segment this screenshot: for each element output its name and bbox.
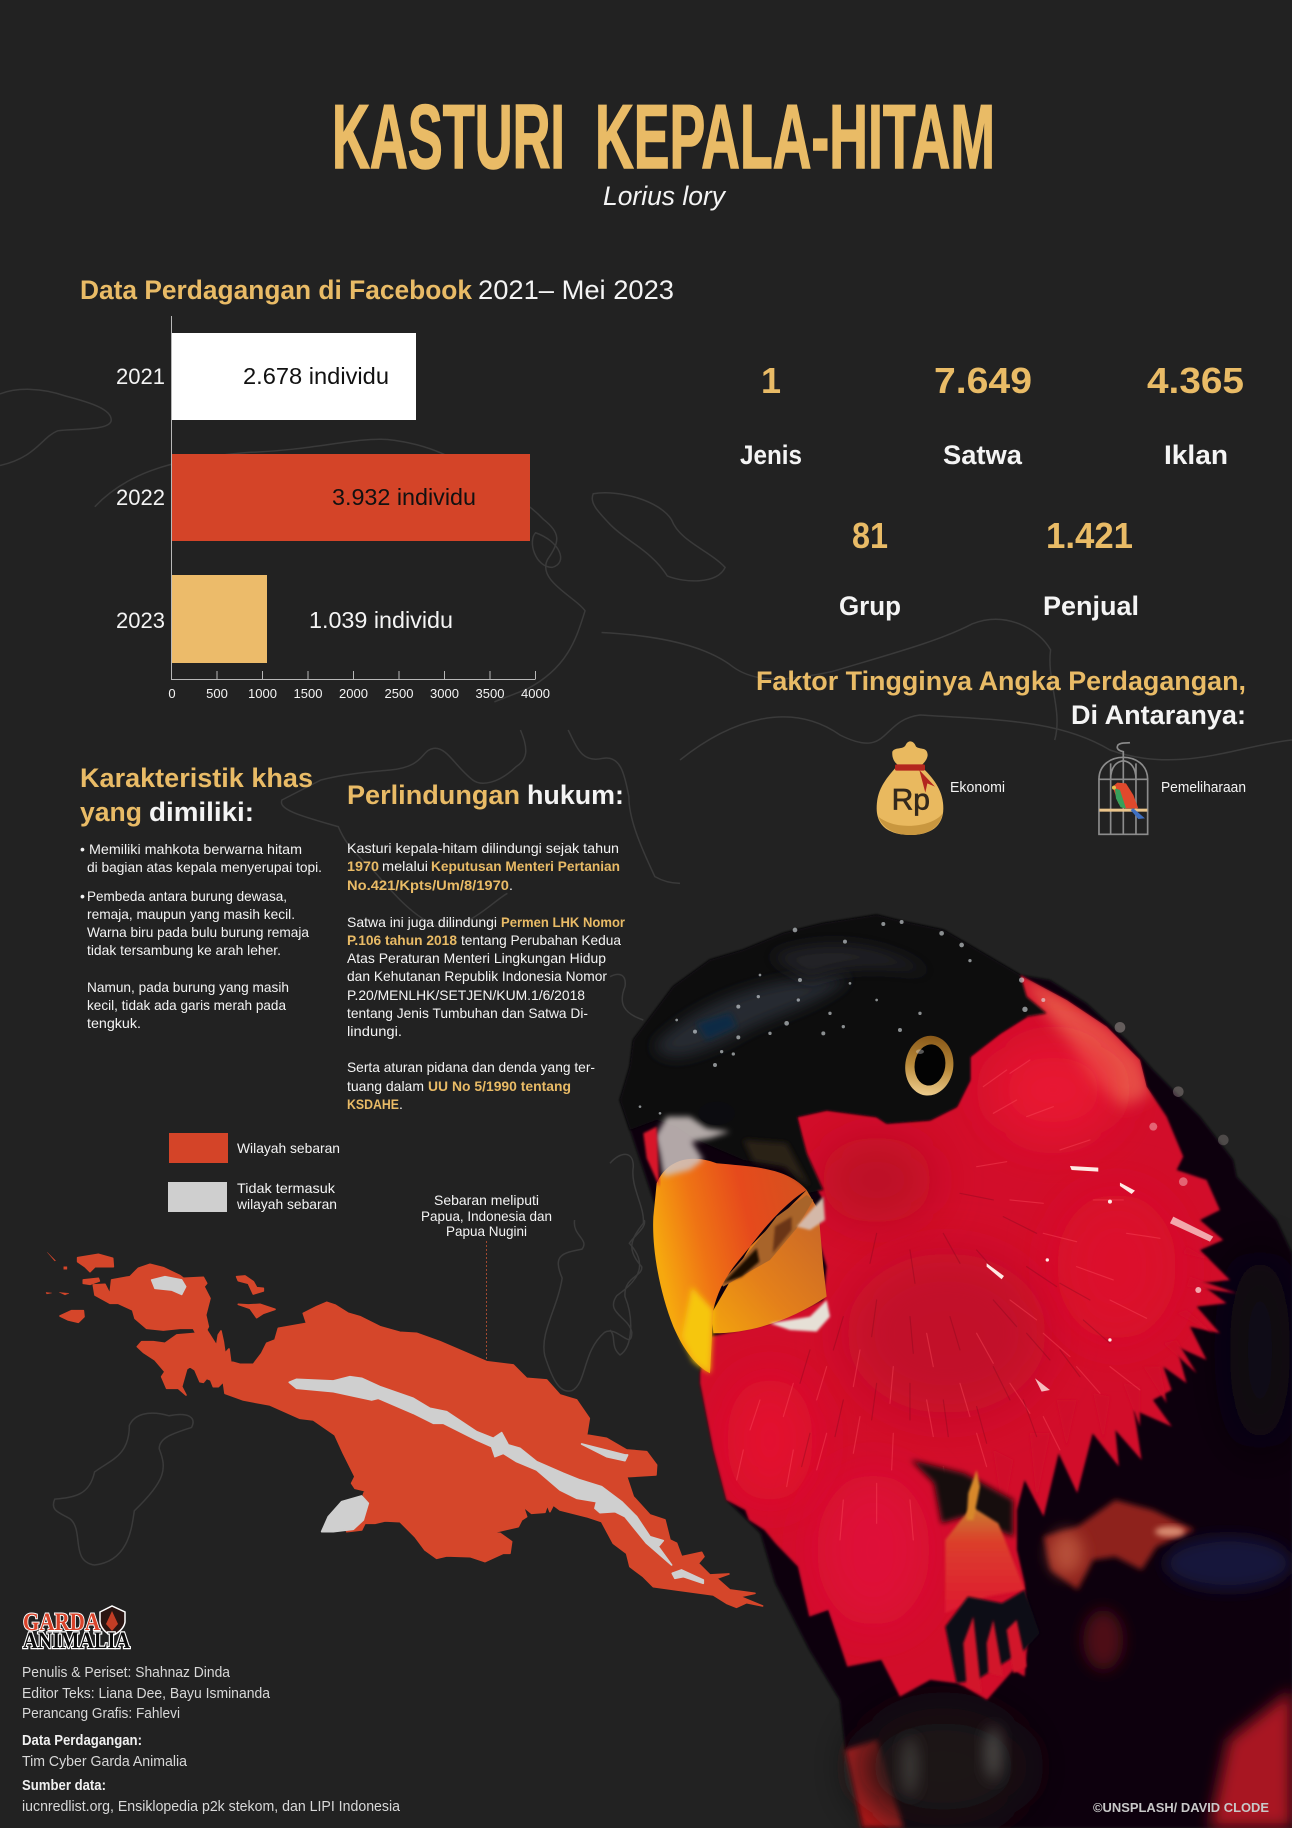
- feather strokes: [737, 1060, 1160, 1540]
- bar 2022: [172, 454, 530, 541]
- text block: legal protection: .: [399, 1096, 403, 1112]
- text block: legal protection: Permen LHK Nomor: [501, 914, 626, 930]
- text block: characteristics: Namun, pada burung yang masih: [87, 979, 289, 995]
- text block: legal protection: Kasturi kepala-hitam dilindungi sejak tahun: [347, 840, 619, 856]
- text block: characteristics: di bagian atas kepala menyerupai topi.: [87, 859, 322, 875]
- eye: [901, 1033, 957, 1099]
- credits: Penulis & Periset: Shahnaz Dinda: [22, 1665, 231, 1681]
- text block: legal protection: KSDAHE: [347, 1096, 399, 1112]
- bar chart: individuals traded per year: 2500: [385, 686, 413, 701]
- text block: characteristics: Memiliki mahkota berwarna hitam: [89, 841, 302, 857]
- statistics panel: Jenis: [740, 440, 802, 470]
- statistics panel: Iklan: [1164, 440, 1228, 470]
- text block: legal protection: tentang Perubahan Kedua: [461, 932, 621, 948]
- credits: Perancang Grafis: Fahlevi: [22, 1706, 180, 1722]
- title: KASTURI: [332, 87, 565, 188]
- text block: characteristics: tidak tersambung ke arah leher.: [87, 942, 281, 958]
- bar chart: individuals traded per year: [116, 316, 550, 701]
- statistics panel: Penjual: [1043, 591, 1139, 621]
- text block: legal protection: lindungi.: [347, 1023, 402, 1039]
- statistics panel: 1: [761, 360, 781, 401]
- bar chart: individuals traded per year: 2000: [339, 686, 368, 701]
- text block: legal protection: 1970: [347, 858, 379, 874]
- text block: legal protection: .: [509, 877, 513, 893]
- subtitle: scientific name: Lorius lory: [603, 181, 726, 211]
- text block: characteristics: Warna biru pada bulu burung remaja: [87, 924, 309, 940]
- map callout: [421, 1192, 552, 1362]
- photo credit: ©UNSPLASH/ DAVID CLODE: [1093, 1800, 1269, 1815]
- icon: money bag: Rp: [892, 783, 930, 816]
- logo: Garda Animalia: [23, 1606, 130, 1653]
- text block: legal protection: Keputusan Menteri Pertanian: [431, 858, 620, 874]
- heading: factors behind the trade: [756, 666, 1246, 730]
- heading: legal protection: Perlindungan: [347, 780, 520, 810]
- neck shadow and orange feather: [911, 1460, 1040, 1693]
- credits: Sumber data:: [22, 1778, 106, 1794]
- bar chart: individuals traded per year: 4000: [521, 686, 550, 701]
- red face and bib: [700, 975, 1237, 1700]
- text block: legal protection: tentang Jenis Tumbuhan dan Satwa Di-: [347, 1005, 588, 1021]
- bar 2021: [172, 333, 416, 420]
- heading: trade data on Facebook: 2021– Mei 2023: [478, 275, 674, 305]
- map callout: Papua, Indonesia dan: [421, 1208, 552, 1224]
- text block: characteristics: Pembeda antara burung dewasa,: [87, 888, 287, 904]
- bar chart: individuals traded per year: 1500: [294, 686, 322, 701]
- beak: [643, 1102, 830, 1373]
- text block: legal protection: UU No 5/1990 tentang: [428, 1078, 571, 1094]
- map callout: Papua Nugini: [446, 1223, 527, 1239]
- text block: legal protection: No.421/Kpts/Um/8/1970: [347, 877, 509, 893]
- statistics panel: 1.421: [1046, 515, 1133, 556]
- map legend: wilayah sebaran: [236, 1196, 337, 1212]
- heading: trade data on Facebook: Data Perdagangan di Facebook: [80, 275, 473, 305]
- heading: characteristics: [80, 763, 313, 827]
- bar chart: individuals traded per year: 2.678 individu: [243, 363, 389, 389]
- credits: [22, 1665, 401, 1815]
- text block: characteristics: •: [80, 841, 85, 857]
- wing red patches: [1044, 1500, 1195, 1590]
- credits: Editor Teks: Liana Dee, Bayu Isminanda: [22, 1686, 271, 1702]
- black head cap: [620, 915, 1047, 1193]
- credits: Data Perdagangan:: [22, 1733, 142, 1749]
- label: economy: Ekonomi: [950, 780, 1005, 796]
- bar chart: individuals traded per year: 3000: [430, 686, 459, 701]
- statistics panel: 4.365: [1147, 360, 1244, 401]
- text block: legal protection: P.106 tahun 2018: [347, 932, 457, 948]
- bar chart: individuals traded per year: 1000: [248, 686, 277, 701]
- text block: legal protection: Satwa ini juga dilindungi: [347, 914, 497, 930]
- text block: legal protection: dan Kehutanan Republik Indonesia Nomor: [347, 968, 607, 984]
- heading: legal protection: hukum:: [527, 780, 624, 810]
- map legend: Tidak termasuk: [237, 1180, 336, 1196]
- bar chart: individuals traded per year: 2023: [116, 608, 165, 633]
- bar 2023: [172, 575, 267, 663]
- text block: characteristics: remaja, maupun yang masih kecil.: [87, 906, 295, 922]
- text block: legal protection: melalui: [382, 858, 428, 874]
- icon: money bag: [877, 741, 943, 835]
- heading: factors behind the trade: Di Antaranya:: [1071, 700, 1246, 730]
- bird body: [620, 915, 1292, 1828]
- map legend: [168, 1133, 340, 1212]
- heading: characteristics: Karakteristik khas: [80, 763, 313, 793]
- text block: legal protection: tuang dalam: [347, 1078, 424, 1094]
- bar chart: individuals traded per year: 3500: [476, 686, 504, 701]
- bar chart: individuals traded per year: 3.932 individu: [332, 484, 476, 510]
- label: pet keeping: Pemeliharaan: [1161, 780, 1246, 796]
- heading: trade data on Facebook: [80, 275, 674, 305]
- logo: Garda Animalia: GARDA: [23, 1609, 100, 1636]
- excluded areas: [152, 1277, 703, 1583]
- statistics panel: [740, 360, 1244, 621]
- bar chart: individuals traded per year: 0: [168, 686, 176, 701]
- white flecks: [987, 1022, 1229, 1392]
- credits: iucnredlist.org, Ensiklopedia p2k stekom, dan LIPI Indonesia: [22, 1799, 401, 1815]
- statistics panel: Grup: [839, 591, 901, 621]
- title: [332, 87, 995, 188]
- heading: factors behind the trade: Faktor Tingginya Angka Perdagangan,: [756, 666, 1246, 696]
- map callout: Sebaran meliputi: [434, 1192, 539, 1208]
- credits: Tim Cyber Garda Animalia: [22, 1754, 188, 1770]
- map: distribution across New Guinea: [46, 1252, 763, 1607]
- statistics panel: 81: [852, 515, 888, 556]
- icon: bird cage: [1099, 743, 1148, 834]
- distribution area: [46, 1252, 763, 1607]
- text block: legal protection: [347, 840, 626, 1112]
- heading: legal protection: [347, 780, 624, 810]
- photo: black-capped lory: [620, 915, 1292, 1828]
- text block: characteristics: kecil, tidak ada garis merah pada: [87, 997, 286, 1013]
- statistics panel: Satwa: [943, 440, 1023, 470]
- text block: characteristics: tengkuk.: [87, 1015, 141, 1031]
- heading: characteristics: yang: [80, 797, 142, 827]
- text block: characteristics: [80, 841, 322, 1031]
- logo: Garda Animalia: ANIMALIA: [23, 1628, 130, 1653]
- bar chart: individuals traded per year: 500: [206, 686, 228, 701]
- heading: characteristics: dimiliki:: [149, 797, 254, 827]
- title: KEPALA-HITAM: [595, 87, 995, 188]
- text block: legal protection: P.20/MENLHK/SETJEN/KUM.1/6/2018: [347, 987, 585, 1003]
- text block: characteristics: •: [80, 888, 85, 904]
- statistics panel: 7.649: [934, 360, 1032, 401]
- background map outlines: [0, 389, 1292, 1565]
- bar chart: individuals traded per year: 2022: [116, 485, 165, 510]
- bar chart: individuals traded per year: 2021: [116, 364, 165, 389]
- face shading: [727, 975, 1177, 1627]
- map legend: Wilayah sebaran: [237, 1140, 340, 1156]
- text block: legal protection: Atas Peraturan Menteri Lingkungan Hidup: [347, 950, 606, 966]
- bar chart: individuals traded per year: 1.039 individu: [309, 607, 453, 633]
- text block: legal protection: Serta aturan pidana dan denda yang ter-: [347, 1059, 595, 1075]
